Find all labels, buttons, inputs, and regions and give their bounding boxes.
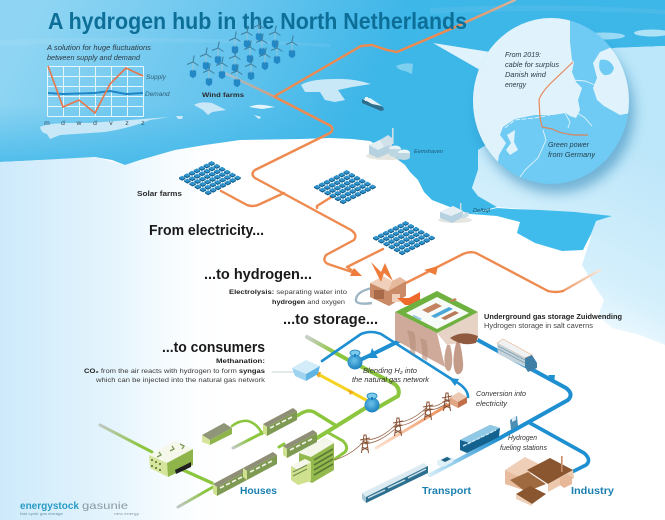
small terrace building	[202, 423, 232, 445]
yellow syngas pipe	[314, 372, 368, 401]
Danish wind caption: cable for surplus	[505, 62, 560, 69]
chart day axis: v	[109, 120, 113, 127]
electrolysis text	[229, 289, 347, 306]
conversion caption	[476, 389, 526, 408]
chart day axis: z	[125, 120, 129, 127]
power lines	[334, 393, 452, 460]
car	[437, 456, 454, 467]
storage caption	[484, 314, 622, 330]
solar farm centre	[314, 170, 376, 204]
green gas network	[100, 337, 399, 507]
leader line to methanation plant	[272, 371, 296, 373]
storage green surface	[395, 291, 478, 333]
chart grid	[48, 66, 144, 116]
chart series labels: Supply	[146, 74, 167, 81]
methanation text: which can be injected into the natural gas network	[95, 377, 266, 384]
storage rock face	[395, 312, 445, 367]
label: industry: Industry	[571, 486, 614, 497]
valve: upper blending point	[348, 350, 362, 370]
chart day axis: m	[44, 120, 50, 127]
methanation plant	[292, 348, 320, 381]
office buildings	[291, 438, 334, 485]
estuary: Dollard	[470, 208, 612, 251]
title: A hydrogen hub in the North Netherlands	[48, 8, 467, 34]
chart day axis: z	[141, 120, 145, 127]
logo: gasunie: new energy	[114, 512, 139, 516]
methanation text	[84, 358, 266, 384]
background: coastal water band	[0, 105, 340, 170]
storage caption: Underground gas storage Zuidwending	[484, 314, 622, 321]
valve: lower blending point	[364, 393, 380, 412]
conversion caption: electricity	[476, 399, 507, 408]
inset map: Denmark and Germany	[433, 10, 634, 193]
Danish wind caption: From 2019:	[505, 52, 541, 59]
terraced houses	[213, 408, 317, 496]
Germany caption: Green power	[548, 140, 590, 149]
chart day axis: w	[76, 120, 82, 127]
map rivers and coast	[505, 80, 595, 177]
wind farm turbines	[187, 18, 298, 87]
methanation text: Methanation:	[216, 358, 265, 365]
heading: to storage: ...to storage...	[283, 311, 378, 328]
fueling caption: Hydrogen	[508, 435, 537, 442]
methanation text: CO₂ from the air reacts with hydrogen to form syngas	[84, 368, 265, 375]
bus	[460, 425, 500, 453]
underground gas storage block	[395, 291, 478, 374]
Delfzijl label: Delfzijl	[473, 208, 491, 214]
Delfzijl plant	[438, 203, 472, 223]
fueling caption	[500, 435, 547, 452]
solar farms label: Solar farms	[137, 191, 182, 198]
chart day axis	[44, 120, 145, 127]
solar farm west	[179, 161, 241, 195]
fueling caption: fueling stations	[500, 445, 547, 452]
logo: energystock: fast cycle gas storage	[20, 512, 63, 516]
background: sea streaks	[0, 5, 665, 47]
Danish wind caption: energy	[505, 82, 526, 89]
supply line	[48, 66, 143, 113]
storage caption: Hydrogen storage in salt caverns	[484, 323, 594, 330]
orange electricity network	[221, 0, 600, 292]
chart day axis: d	[61, 120, 65, 127]
logo: gasunie	[82, 500, 139, 516]
chart subtitle: A solution for huge fluctuations	[46, 43, 151, 52]
chart series labels: Demand	[145, 91, 170, 98]
heading: to hydrogen: ...to hydrogen...	[204, 266, 312, 283]
blue hydrogen network	[322, 326, 589, 475]
islands	[40, 30, 665, 139]
background: sea	[0, 0, 665, 260]
salt caverns	[407, 330, 428, 361]
Eemshaven plant	[366, 128, 410, 160]
logo: energystock: energystock	[20, 501, 79, 512]
Germany caption	[548, 140, 595, 159]
chart subtitle	[46, 43, 151, 62]
electrolysis text: Electrolysis: separating water into	[229, 289, 347, 296]
Danish wind caption	[505, 52, 560, 89]
Eemshaven label: Eemshaven	[414, 149, 443, 155]
electrolysis text: hydrogen and oxygen	[272, 299, 345, 306]
storage site plan	[406, 297, 469, 329]
icon: pylons	[442, 393, 452, 411]
truck	[497, 339, 537, 372]
blending caption	[352, 368, 430, 384]
apartment block	[149, 441, 193, 477]
demand line	[48, 91, 143, 94]
heading: from electricity: From electricity...	[149, 222, 264, 239]
conversion plant	[450, 392, 467, 408]
train	[362, 463, 428, 503]
label: houses: Houses	[240, 486, 277, 497]
Danish cable	[539, 62, 573, 127]
conversion caption: Conversion into	[476, 389, 526, 398]
Danish wind caption: Danish wind	[505, 72, 547, 79]
map shadow	[478, 31, 634, 193]
chart series labels	[145, 74, 170, 98]
logo: gasunie: gasunie	[82, 500, 128, 512]
blending caption: Blending H₂ into	[363, 368, 417, 375]
industry complex	[505, 456, 574, 506]
chart subtitle: between supply and demand	[47, 53, 141, 62]
map land base	[473, 18, 629, 184]
label: transport: Transport	[422, 486, 472, 497]
electrolysis plant	[356, 262, 420, 306]
German cable	[542, 127, 588, 135]
ship	[362, 97, 384, 111]
icon: lightning	[371, 262, 393, 282]
fueling station	[510, 416, 518, 430]
wind farms label: Wind farms	[202, 92, 244, 99]
solar farm east	[373, 221, 435, 255]
blending caption: the natural gas network	[352, 377, 430, 384]
heading: to consumers: ...to consumers	[162, 339, 265, 356]
chart: supply and demand	[44, 43, 170, 127]
chart day axis: d	[93, 120, 97, 127]
map sea	[473, 18, 629, 162]
Germany caption: from Germany	[548, 150, 595, 159]
callout pointer	[433, 43, 490, 70]
icon: hydrogen output arrow	[397, 292, 420, 305]
